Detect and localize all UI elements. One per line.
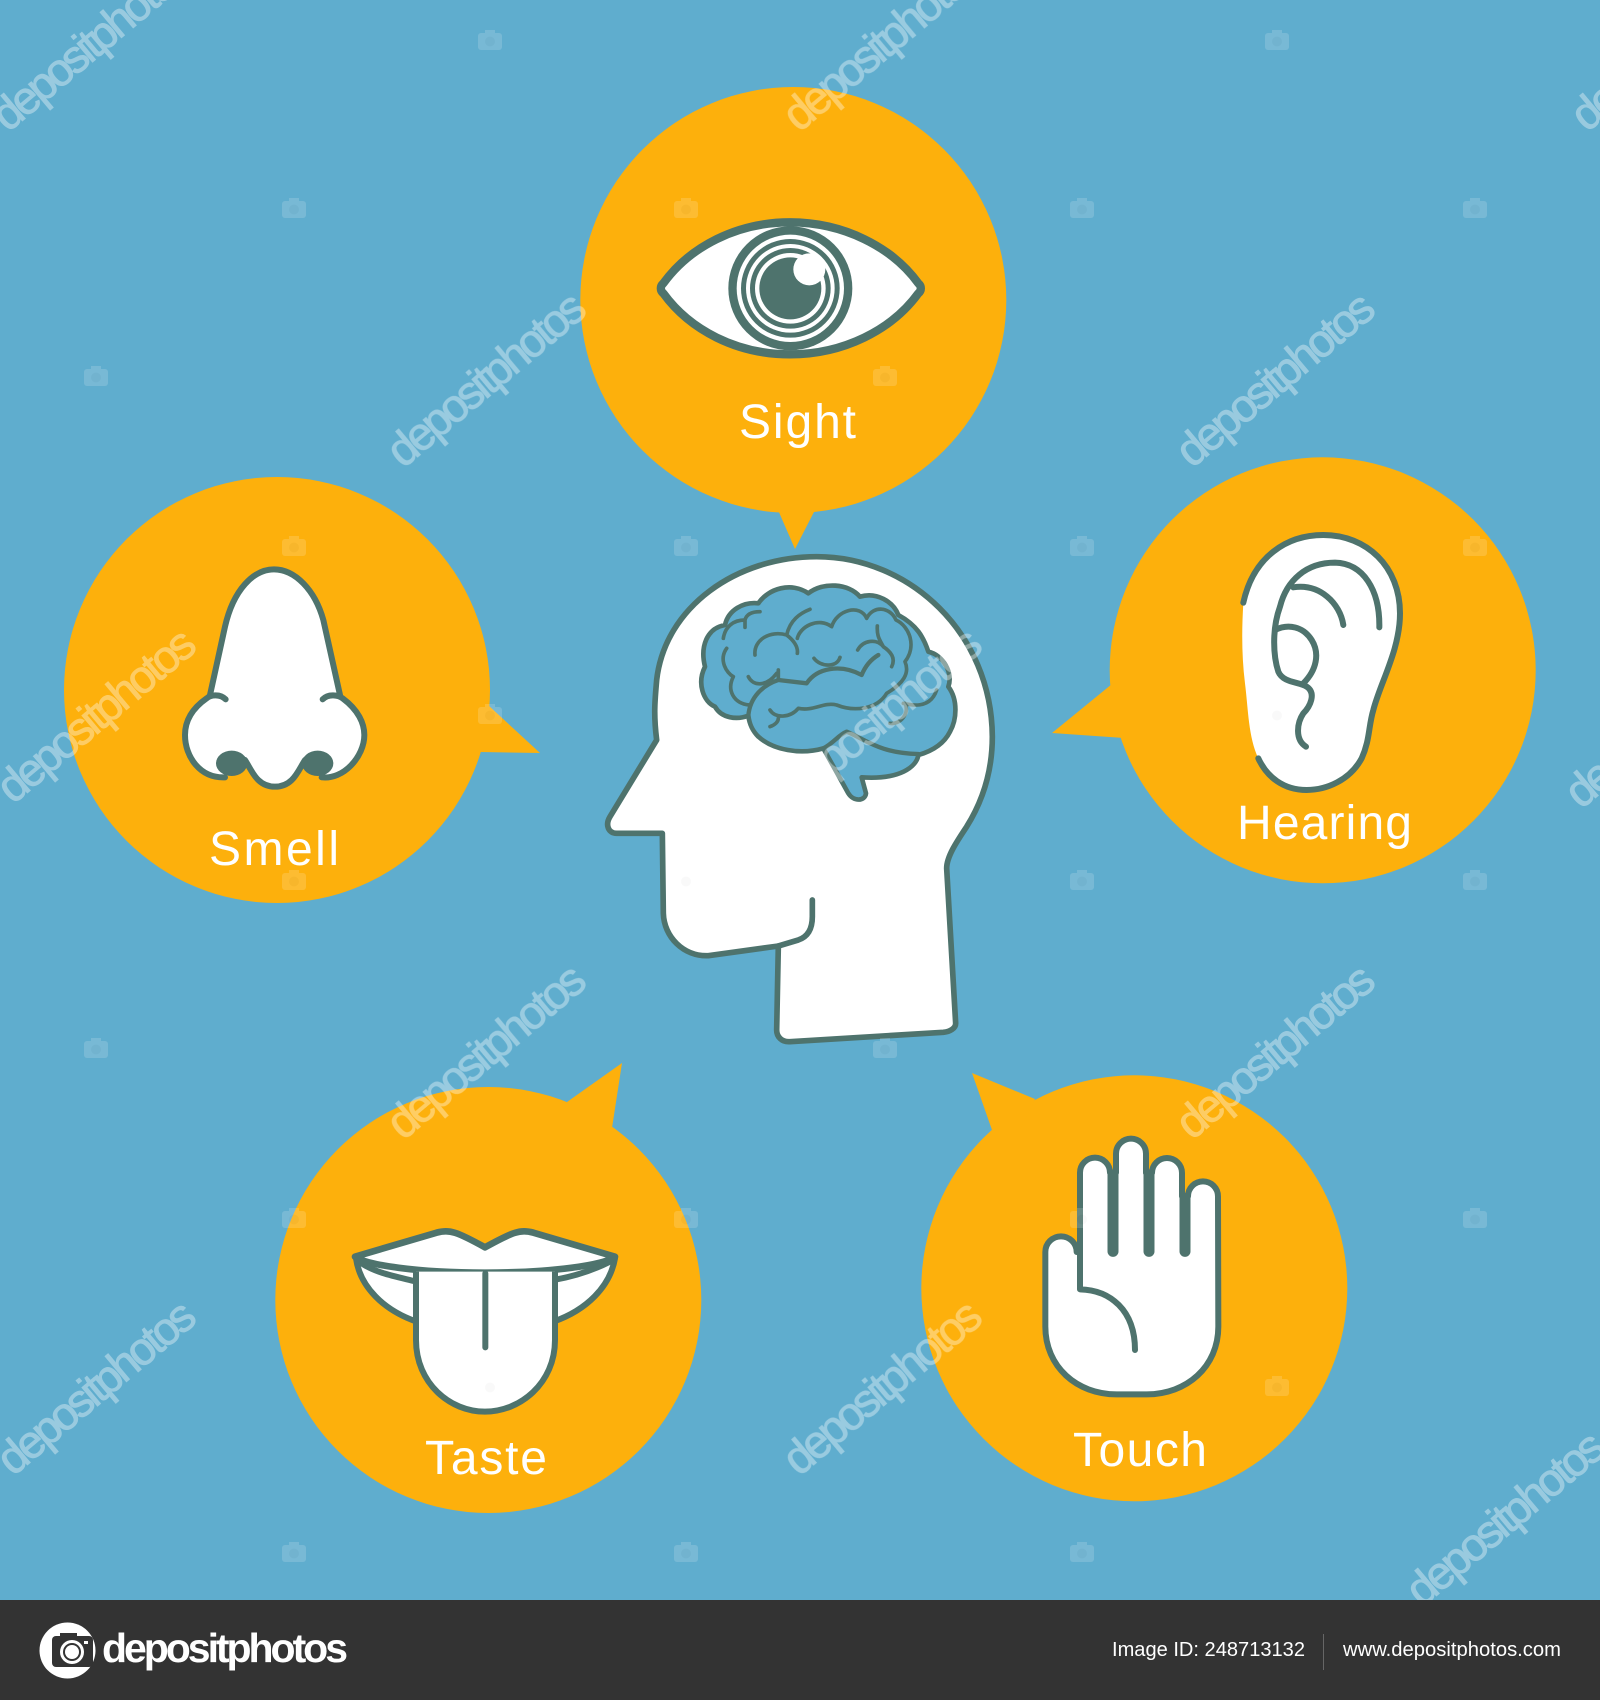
panel: hearing bubble [1052, 457, 1536, 883]
label: Touch: Touch [1073, 1424, 1207, 1477]
watermark text repeats: depositphotos [376, 953, 596, 1149]
logo text: depositphotos [102, 1625, 348, 1671]
watermark text repeats: depositphotos [376, 281, 596, 477]
footer bar [0, 1600, 1600, 1700]
panel: sight bubble [580, 87, 1006, 549]
label: Taste: Taste [425, 1432, 547, 1485]
watermark text repeats: depositphotos [1165, 281, 1385, 477]
watermark text repeats: depositphotos [1165, 953, 1385, 1149]
label: Smell: Smell [209, 823, 339, 876]
bubble shape: sight [580, 87, 1006, 549]
logo: camera icon [40, 1622, 96, 1678]
bubble shape: touch [921, 1073, 1347, 1501]
icon: hand [1045, 1139, 1218, 1394]
label: Sight: Sight [739, 396, 856, 449]
watermark text repeats: depositphotos [772, 1289, 992, 1485]
label: Hearing: Hearing [1237, 797, 1412, 850]
image id: Image ID: 248713132 [1112, 1639, 1305, 1661]
bubble shape: smell [64, 477, 540, 903]
central head with brain [608, 557, 992, 1042]
bubble shape: hearing [1052, 457, 1536, 883]
panel: smell bubble [64, 477, 540, 903]
panel: touch bubble [921, 1073, 1347, 1501]
website: www.depositphotos.com [1342, 1639, 1561, 1661]
watermark camera icons [84, 30, 1487, 1562]
head silhouette [608, 557, 992, 1042]
brain [701, 586, 955, 800]
watermark text repeats: depositphotos [772, 617, 992, 813]
icon: nose [185, 569, 364, 787]
icon: ear [1242, 535, 1400, 790]
panel: taste bubble [275, 1063, 701, 1513]
bubble shape: taste [275, 1063, 701, 1513]
icon: lips and tongue [355, 1231, 615, 1412]
icon: eye [661, 222, 921, 354]
